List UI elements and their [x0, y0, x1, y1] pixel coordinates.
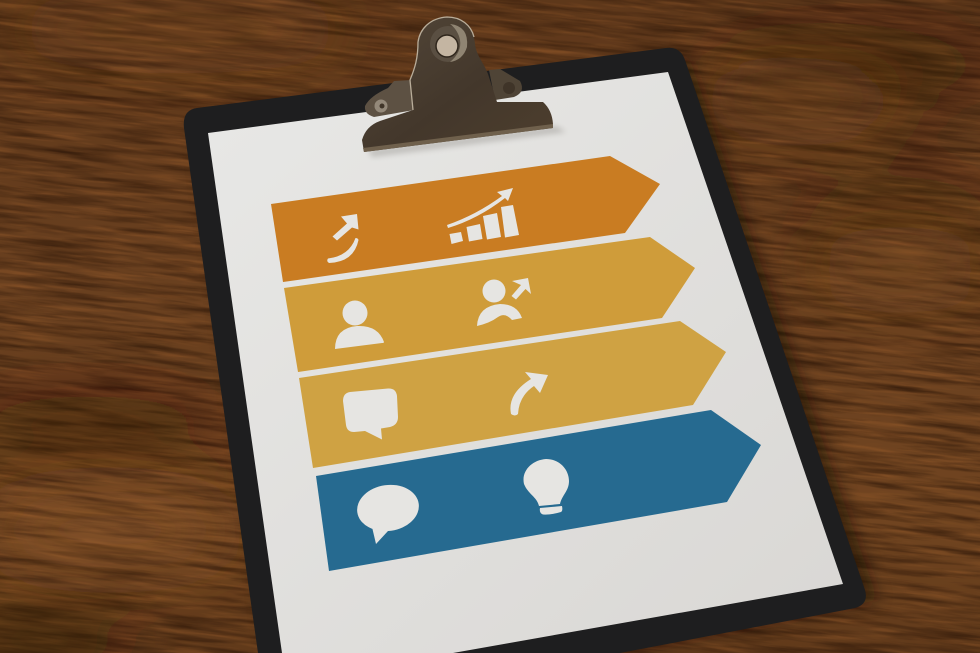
icon: oval speech bubble: [354, 481, 422, 544]
paper sheet: [208, 72, 843, 653]
icon: person with arrow: [477, 278, 531, 326]
clip eyelet: [430, 24, 467, 62]
band 4: blue ideas: [316, 410, 761, 571]
clipboard backing board: [184, 48, 866, 653]
icon: rising bar chart: [447, 188, 519, 244]
metal binder clip: [362, 17, 566, 157]
clip edge highlight: [410, 17, 474, 110]
clip hinge left: [365, 80, 414, 117]
icon: square speech bubble: [343, 388, 398, 440]
icon: light bulb: [524, 459, 569, 515]
band 1: orange growth: [271, 156, 660, 282]
icon: curved arrow up: [327, 214, 358, 263]
clip body: [362, 17, 553, 152]
icon: curved arrow: [510, 372, 548, 416]
clipboard shadow: [621, 54, 883, 653]
band 2: amber people: [284, 237, 695, 372]
band 2 shape: [284, 237, 695, 372]
icon: person: [335, 300, 384, 349]
band 1 shape: [271, 156, 660, 282]
band 3: mustard conversation: [299, 321, 726, 468]
clip shadow: [368, 126, 566, 157]
clip hinge right: [489, 69, 522, 100]
band 3 shape: [299, 321, 726, 468]
band 4 shape: [316, 410, 761, 571]
clip lower lip: [363, 124, 553, 152]
